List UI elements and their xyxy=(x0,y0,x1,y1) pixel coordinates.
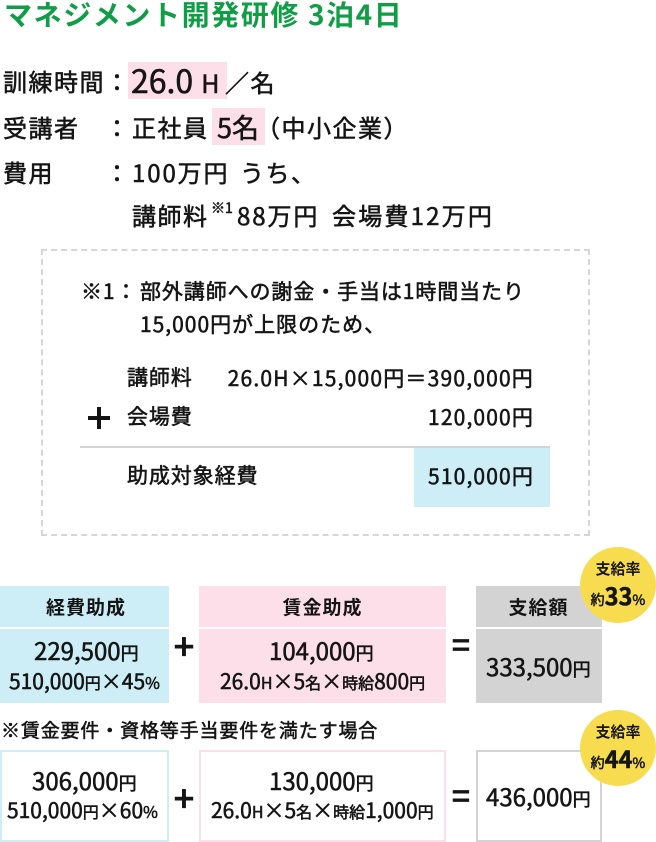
total label: 助成対象経費 xyxy=(127,460,258,490)
cell: payment (conditional) xyxy=(476,750,602,842)
badge: rate 33%: 支給率 xyxy=(595,558,640,579)
condition note: ※賃金要件・資格等手当要件を満たす場合 xyxy=(1,716,378,743)
footnote marker: ※1： xyxy=(81,276,137,306)
row: cost: 講師料 xyxy=(132,197,208,232)
badge: rate 44%: 支給率 xyxy=(595,721,640,742)
row: participants: 5名 xyxy=(217,107,259,146)
row: cost: 88万円 xyxy=(237,197,319,232)
cell: expense subsidy amount: 510,000円×45% xyxy=(9,666,160,696)
row: cost: ： xyxy=(105,154,130,189)
cell: expense subsidy amount xyxy=(0,629,169,703)
highlight: 5名 xyxy=(212,108,265,145)
row: participants: 受講者 xyxy=(3,109,80,144)
cell: wage subsidy amount: 104,000円 xyxy=(269,632,374,667)
cell: wage subsidy header xyxy=(199,586,446,627)
operator: plus: + xyxy=(173,619,195,671)
cell: wage subsidy amount xyxy=(199,629,446,703)
total amount cell xyxy=(414,448,550,507)
plus sign xyxy=(88,407,110,429)
row: cost: 費用 xyxy=(3,154,54,189)
total rule xyxy=(80,446,550,448)
row: participants xyxy=(3,107,409,146)
total amount: 510,000円 xyxy=(428,461,534,491)
row: cost: 会場費12万円 xyxy=(332,197,494,232)
row: training hours: ／名 xyxy=(225,64,276,99)
venue fee label: 会場費 xyxy=(127,401,193,431)
footnote body: 部外講師への謝金・手当は1時間当たり xyxy=(140,276,525,306)
cell: wage subsidy amount: 26.0H×5名×時給800円 xyxy=(220,666,425,696)
badge: rate 33% xyxy=(580,547,656,623)
row: training hours: 訓練時間 xyxy=(3,63,105,98)
cell: wage subsidy (conditional): 26.0H×5名×時給1,000円 xyxy=(211,795,434,825)
operator: plus (conditional): + xyxy=(173,771,195,823)
row: training hours xyxy=(3,57,276,103)
cell: payment header: 支給額 xyxy=(508,593,568,620)
row: cost: うち、 xyxy=(240,154,316,189)
cell: payment header xyxy=(476,586,602,627)
venue fee amount: 120,000円 xyxy=(428,402,534,432)
lecturer fee formula: 26.0H×15,000円＝390,000円 xyxy=(228,363,534,393)
row: training hours: 26.0 H xyxy=(131,57,219,103)
highlight: 26.0H xyxy=(128,62,227,99)
badge: rate 44%: 約44% xyxy=(591,741,645,775)
cell: expense subsidy header: 経費助成 xyxy=(46,593,126,620)
badge: rate 44% xyxy=(580,710,656,786)
badge: rate 33%: 約33% xyxy=(591,578,645,612)
row: participants: （中小企業） xyxy=(256,109,409,144)
row: training hours: ： xyxy=(105,63,130,98)
cell: wage subsidy (conditional): 130,000円 xyxy=(269,762,374,797)
cell: wage subsidy header: 賃金助成 xyxy=(282,593,362,620)
cell: payment (conditional): 436,000円 xyxy=(486,778,591,813)
row: participants: 正社員 xyxy=(132,109,208,144)
footnote body line 2: 15,000円が上限のため、 xyxy=(140,309,386,339)
cell: payment amount: 333,500円 xyxy=(486,648,591,683)
cell: wage subsidy (conditional) xyxy=(199,750,446,842)
lecturer fee label: 講師料 xyxy=(127,362,193,392)
cell: expense subsidy amount: 229,500円 xyxy=(34,632,139,667)
row: cost xyxy=(3,154,494,232)
cell: expense subsidy (conditional): 510,000円×60% xyxy=(7,795,158,825)
operator: equals: = xyxy=(452,621,470,667)
row: participants: ： xyxy=(105,109,130,144)
panel: footnote calculation xyxy=(41,249,590,536)
cell: expense subsidy header xyxy=(0,586,172,627)
operator: equals (conditional): = xyxy=(452,772,470,818)
cell: expense subsidy (conditional): 306,000円 xyxy=(32,762,137,797)
row: cost: ※1 xyxy=(211,198,233,218)
cell: payment amount xyxy=(476,629,602,703)
row: cost: 100万円 xyxy=(132,154,229,189)
cell: expense subsidy (conditional) xyxy=(0,750,169,842)
